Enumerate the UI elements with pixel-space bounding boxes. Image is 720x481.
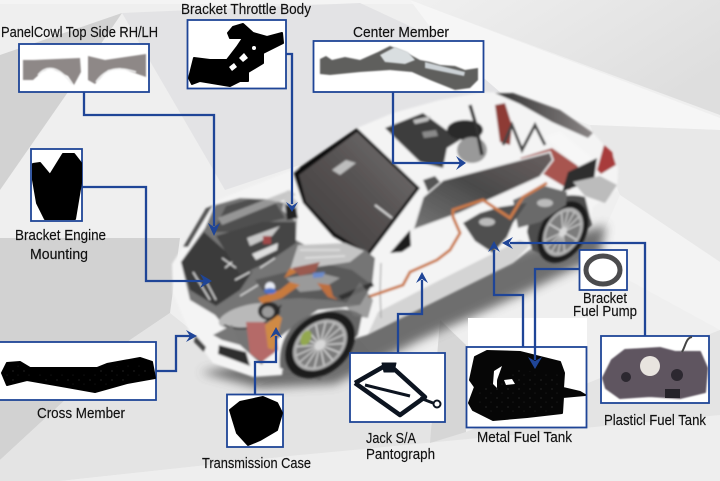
windshield xyxy=(293,128,420,257)
arrow: jack xyxy=(398,272,428,353)
hood line and front bumper details xyxy=(183,205,250,366)
panel: PanelCowl xyxy=(19,44,149,92)
part: metal tank xyxy=(469,351,585,420)
arrow: engine mounting xyxy=(82,187,212,288)
side sill dark strip xyxy=(338,282,374,300)
headlight xyxy=(216,298,281,334)
part: left cowl xyxy=(23,58,81,85)
part: cross member xyxy=(2,358,155,392)
arrow: panel cowl to engine bay xyxy=(84,92,220,236)
panel: Cross Member xyxy=(0,342,156,400)
panel: Bracket Throttle Body xyxy=(188,20,286,88)
panel: Center Member xyxy=(314,41,484,92)
fuel tank zone xyxy=(463,203,527,253)
part: pump ring xyxy=(586,256,620,284)
arrow: center member xyxy=(393,92,466,170)
sill shading xyxy=(368,240,530,334)
label: Bracket Fuel Pump: Bracket xyxy=(583,291,627,307)
label: Jack S/A Pantograph: Pantograph xyxy=(366,447,435,463)
rear fender shading xyxy=(573,176,617,203)
panel: Jack S/A Pantograph xyxy=(350,353,445,422)
orange fuel line xyxy=(368,183,547,297)
panel: Metal Fuel Tank xyxy=(466,318,587,428)
arrow: transmission case xyxy=(255,327,282,394)
brake caliper xyxy=(298,329,314,347)
label: Bracket Engine Mounting: Mounting xyxy=(30,247,88,263)
label: Bracket Throttle Body: Bracket Throttle Body xyxy=(181,2,312,18)
label: Bracket Engine Mounting: Bracket Engine xyxy=(15,228,106,244)
spare wheel and suspension xyxy=(447,103,592,168)
part: jack xyxy=(355,363,440,415)
panel: Bracket Fuel Pump xyxy=(580,250,627,290)
engine bay xyxy=(181,190,375,365)
arrow: metal fuel tank xyxy=(488,241,523,347)
car shadow xyxy=(200,225,606,388)
arrow: bracket fuel pump xyxy=(528,269,579,369)
label: Jack S/A Pantograph xyxy=(366,431,435,463)
label: Center Member: Center Member xyxy=(353,25,449,41)
label: PanelCowl Top Side RH/LH: PanelCowl Top Side RH/LH xyxy=(1,25,158,41)
label: Transmission Case: Transmission Case xyxy=(202,456,311,472)
rear window xyxy=(495,93,593,138)
dark door mirror pillar xyxy=(390,230,411,253)
side window xyxy=(413,152,553,230)
door line xyxy=(380,263,381,318)
rear seat through roof xyxy=(385,113,460,168)
panel: Plastic Fuel Tank xyxy=(601,336,709,403)
rear wheel xyxy=(527,192,599,272)
label: Bracket Fuel Pump xyxy=(573,291,637,320)
rear wheel arch xyxy=(527,195,592,260)
label: Cross Member: Cross Member xyxy=(37,406,125,422)
part: right cowl xyxy=(88,54,146,84)
arrow: cross member xyxy=(156,330,197,371)
tail light xyxy=(597,145,616,174)
panel: Transmission Case xyxy=(227,394,283,447)
arrow: throttle body xyxy=(286,54,298,212)
front fender arch xyxy=(280,309,362,380)
rear cluster xyxy=(513,186,567,228)
part: transmission xyxy=(230,397,282,445)
car illustration xyxy=(172,92,618,392)
rear red section xyxy=(520,148,578,190)
panel: Bracket Engine Mounting xyxy=(31,149,82,221)
label: Jack S/A Pantograph: Jack S/A xyxy=(366,431,416,447)
part: engine bracket xyxy=(33,154,81,219)
label: Plasticl Fuel Tank: Plasticl Fuel Tank xyxy=(604,413,707,429)
label: Bracket Engine Mounting xyxy=(15,228,106,263)
label: Metal Fuel Tank: Metal Fuel Tank xyxy=(477,430,573,446)
arrow: plastic fuel tank xyxy=(502,237,645,336)
front wheel xyxy=(272,298,368,392)
part: plastic tank xyxy=(603,348,707,398)
red and orange front parts xyxy=(246,315,282,362)
car body xyxy=(172,92,618,377)
rear dark assembly xyxy=(562,158,597,192)
part: center member xyxy=(320,46,478,90)
label: Bracket Fuel Pump: Fuel Pump xyxy=(573,304,637,320)
part: throttle bracket xyxy=(189,24,283,86)
